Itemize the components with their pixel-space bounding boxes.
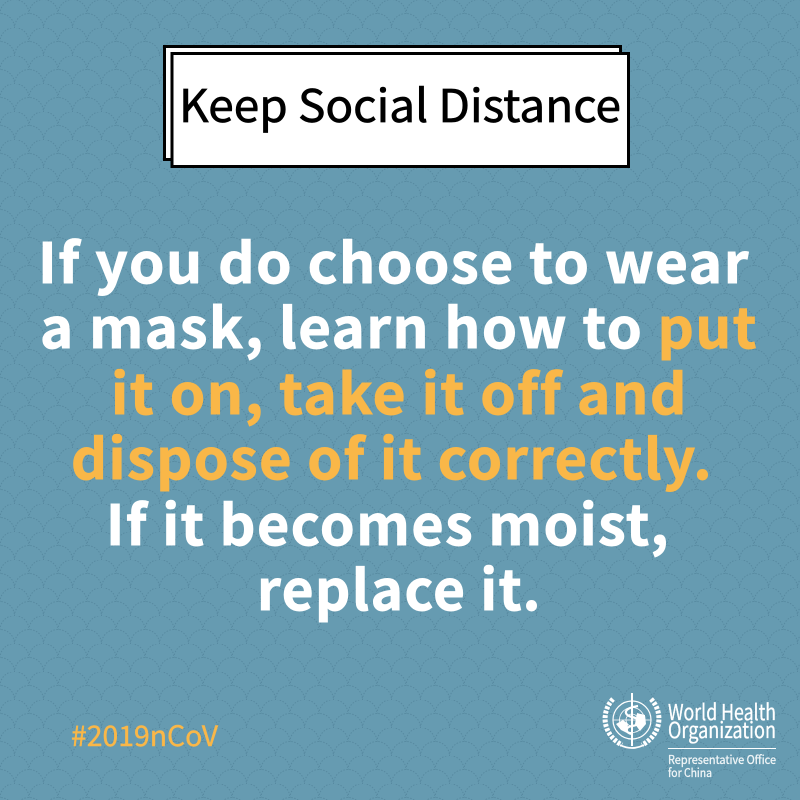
- main message: it on, take it off and: [111, 350, 688, 430]
- icon: WHO emblem: [605, 693, 659, 748]
- WHO logo: [605, 693, 776, 781]
- front card: [172, 54, 628, 166]
- title text: Keep Social Distance: [179, 70, 621, 135]
- WHO logo: for China: [668, 764, 712, 781]
- main message: If it becomes moist,: [106, 481, 670, 561]
- main message: If you do choose to wear: [38, 219, 750, 299]
- office line: Representative Office: [668, 751, 776, 768]
- main message: dispose of it correctly.: [71, 415, 713, 495]
- back card: [164, 46, 620, 160]
- main message: a mask, learn how to put: [40, 284, 758, 364]
- WHO logo: Organization: [668, 713, 776, 745]
- title card: [164, 46, 628, 166]
- hashtag: #2019nCoV: [71, 715, 219, 755]
- main message: replace it.: [257, 546, 542, 626]
- organization name: World Health: [668, 695, 776, 727]
- main message: [38, 219, 758, 626]
